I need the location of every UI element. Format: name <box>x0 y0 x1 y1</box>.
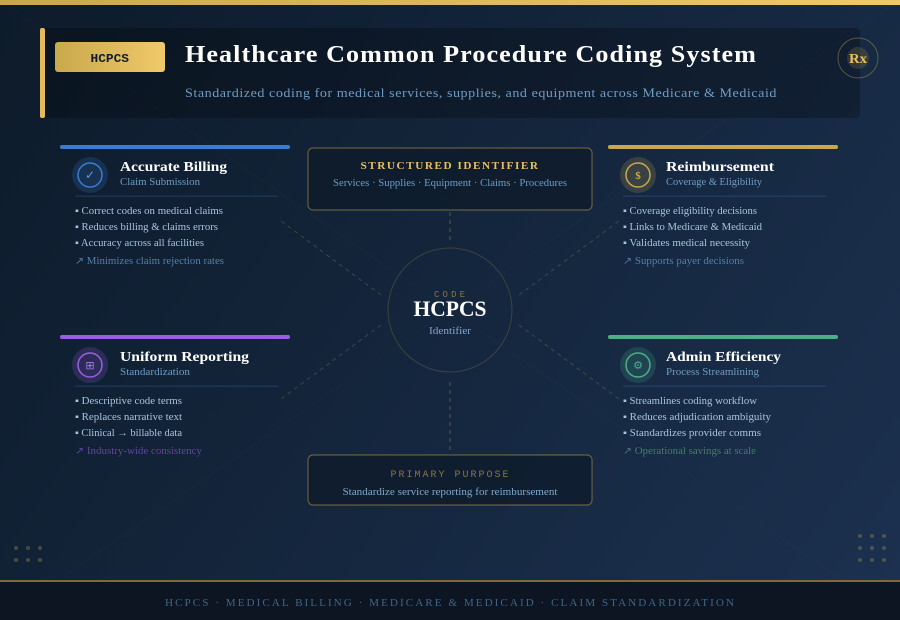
panel: structured identifier <box>308 148 592 210</box>
icon: dollar: $ <box>635 170 641 182</box>
central hub: HCPCS: Identifier <box>429 326 472 337</box>
card: Uniform Reporting: ▪ Clinical → billable data <box>75 428 183 439</box>
decorative dots: left <box>14 546 42 562</box>
title: Healthcare Common Procedure Coding System <box>185 42 757 68</box>
card: Reimbursement: Reimbursement <box>666 160 774 175</box>
card: Reimbursement: ▪ Coverage eligibility decisions <box>623 206 757 217</box>
central hub: HCPCS: HCPCS <box>414 296 486 321</box>
card: Admin Efficiency: ▪ Standardizes provider comms <box>623 428 761 439</box>
panel: primary purpose <box>308 455 592 505</box>
icon: gear <box>620 347 656 383</box>
card: Reimbursement: ▪ Validates medical necessity <box>623 238 750 249</box>
panel: structured identifier: STRUCTURED IDENTIFIER <box>360 160 540 172</box>
panel: structured identifier: Services · Supplies · Equipment · Claims · Procedures <box>333 178 567 189</box>
card: Uniform Reporting: Uniform Reporting <box>120 350 249 365</box>
card: Admin Efficiency: ↗ Operational savings at scale <box>623 446 757 457</box>
card: Admin Efficiency: Admin Efficiency <box>666 350 781 365</box>
card: Uniform Reporting <box>60 335 290 457</box>
card: Accurate Billing: ▪ Correct codes on medical claims <box>75 206 223 217</box>
connector lines <box>281 212 619 450</box>
card: Uniform Reporting: ▪ Replaces narrative text <box>75 412 182 423</box>
icon: check mark <box>72 157 108 193</box>
icon: Rx seal <box>838 38 878 78</box>
icon: grid: ⊞ <box>85 359 95 372</box>
footer: HCPCS · MEDICAL BILLING · MEDICARE & MEDICAID · CLAIM STANDARDIZATION <box>165 597 736 609</box>
decorative dots: right <box>858 534 886 562</box>
icon: gear: ⚙ <box>633 359 643 372</box>
card: Uniform Reporting: ▪ Descriptive code terms <box>75 396 182 407</box>
icon: Rx seal: Rx <box>849 52 867 67</box>
central hub: HCPCS <box>388 248 512 372</box>
icon: check mark: ✓ <box>85 168 95 182</box>
card: Admin Efficiency <box>608 335 838 457</box>
card: Admin Efficiency: Process Streamlining <box>666 367 759 378</box>
card: Reimbursement: Coverage & Eligibility <box>666 177 762 188</box>
card: Reimbursement <box>608 145 838 267</box>
panel: primary purpose: Standardize service reporting for reimbursement <box>342 487 558 498</box>
footer <box>0 580 900 620</box>
header panel <box>40 28 860 118</box>
card: Accurate Billing <box>60 145 290 267</box>
card: Uniform Reporting: ↗ Industry-wide consistency <box>75 446 202 457</box>
subtitle: Standardized coding for medical services, supplies, and equipment across Medicare & Medicaid <box>185 85 777 100</box>
card: Accurate Billing: ↗ Minimizes claim rejection rates <box>75 256 224 267</box>
badge: HCPCS <box>55 42 165 72</box>
card: Reimbursement: ▪ Links to Medicare & Medicaid <box>623 222 762 233</box>
icon: dollar <box>620 157 656 193</box>
top accent bar <box>0 0 900 5</box>
card: Accurate Billing: ▪ Accuracy across all facilities <box>75 238 204 249</box>
card: Uniform Reporting: Standardization <box>120 367 190 378</box>
card: Reimbursement: ↗ Supports payer decisions <box>623 256 744 267</box>
badge: HCPCS: HCPCS <box>90 52 129 66</box>
card: Accurate Billing: Claim Submission <box>120 177 200 188</box>
icon: grid <box>72 347 108 383</box>
card: Accurate Billing: ▪ Reduces billing & claims errors <box>75 222 218 233</box>
card: Accurate Billing: Accurate Billing <box>120 160 227 175</box>
central hub: HCPCS: CODE <box>434 290 467 300</box>
panel: primary purpose: PRIMARY PURPOSE <box>390 470 510 481</box>
card: Admin Efficiency: ▪ Streamlines coding workflow <box>623 396 758 407</box>
card: Admin Efficiency: ▪ Reduces adjudication ambiguity <box>623 412 771 423</box>
